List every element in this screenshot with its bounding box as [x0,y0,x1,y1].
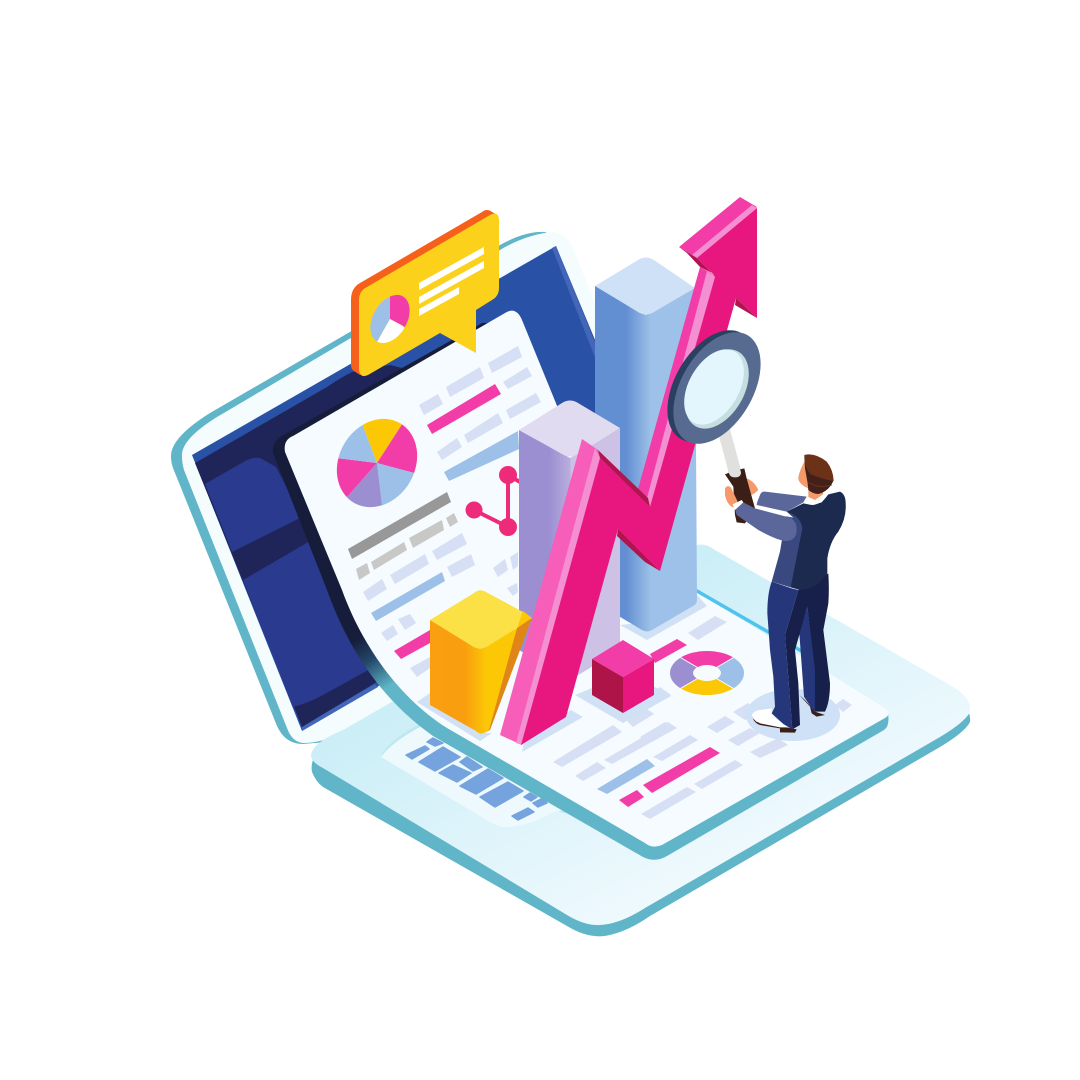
trouser dark panels [785,573,830,729]
arrow side faces [500,197,757,745]
handle shaft [716,422,741,477]
arrow shaded folds [598,247,757,571]
trouser back leg [799,607,816,712]
blue bar shadow [620,595,707,640]
network node graph [466,466,520,536]
bubble face [359,213,499,376]
person legs and shoes [752,573,830,733]
report paper sheet [285,311,889,847]
near sleeve [735,502,797,541]
tall blue bar [595,258,697,632]
pie chart on report [336,418,418,508]
cyan line under paper [697,589,803,654]
shirt under arm [754,508,793,518]
keyboard base plate [311,545,970,936]
hair [804,457,833,494]
collar [804,492,828,505]
screen blue display [192,246,620,731]
donut chart [670,651,744,695]
arrow shadow [522,710,583,752]
purple bar [519,400,620,680]
bubble pie [370,294,410,344]
arrow front face [521,208,757,745]
near hand [725,486,738,508]
person torso, arms and head [722,445,846,590]
pink cube [592,640,654,713]
illustration: isometric laptop with report and growth chart [171,197,970,936]
screen dashboard panels [205,458,372,707]
bubble side [351,210,496,375]
growth arrow [500,197,757,745]
far hand [745,478,758,496]
front shoe [753,718,797,733]
laptop screen back [171,232,650,744]
vest [787,492,846,590]
magnifier grip [725,468,755,523]
keyboard panel with keys [381,700,800,834]
magnifying glass [649,315,779,477]
yellow bar [430,590,532,734]
face [798,462,825,502]
report text lines [348,346,852,819]
handle end [722,445,741,477]
bubble text lines [419,247,484,316]
back shoe [799,695,825,717]
pink cube shadow [575,687,671,723]
person shadow [746,689,840,741]
trouser front leg [767,582,798,729]
yellow box shadow [417,693,492,741]
speech bubble with chart [351,210,499,376]
report paper edge curling into teal [273,322,888,860]
far sleeve [757,492,807,512]
